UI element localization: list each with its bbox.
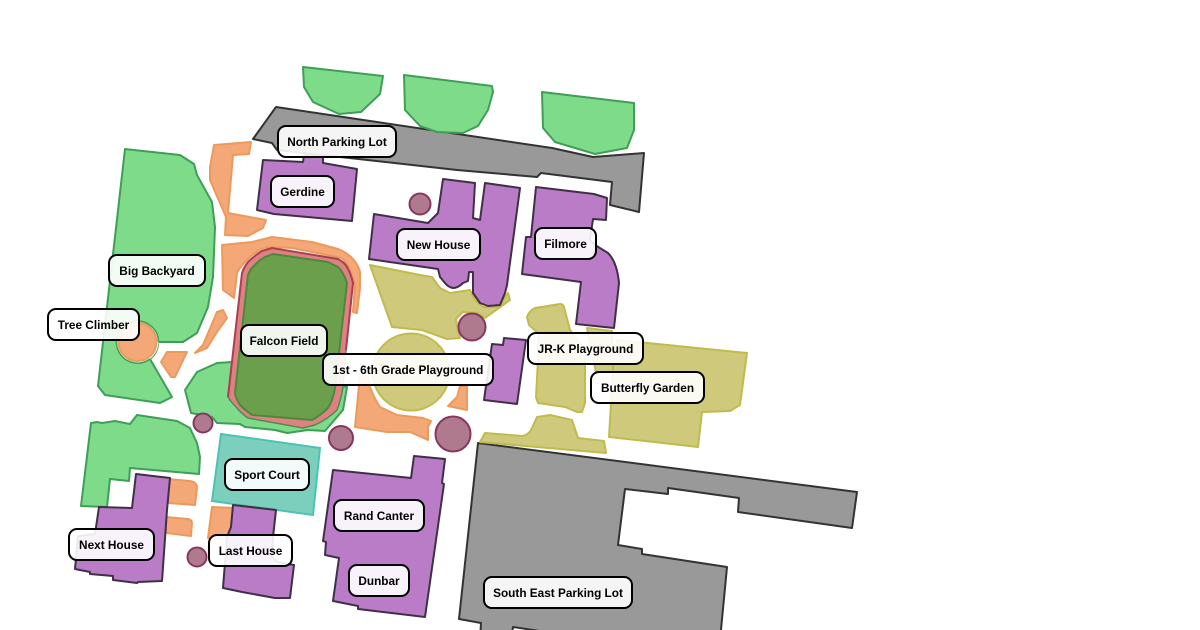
- tree: circle near new house: [410, 194, 430, 214]
- label: North Parking Lot: [278, 126, 396, 157]
- building: small playground building: [484, 338, 526, 404]
- yellow area: butterfly garden: [609, 340, 747, 447]
- yellow area: playground upper: [370, 265, 510, 339]
- green area: top middle: [404, 75, 493, 133]
- label: Falcon Field: Falcon Field: [250, 334, 318, 348]
- sport court: [212, 434, 320, 515]
- label: Big Backyard: [109, 255, 205, 286]
- tree: circle below field: [329, 426, 353, 450]
- orange area: north west walkway: [210, 142, 266, 236]
- label: South East Parking Lot: [484, 577, 632, 608]
- label: Tree Climber: Tree Climber: [58, 318, 130, 332]
- tree: large circle: [436, 416, 470, 452]
- yellow area: playground circle: [372, 334, 450, 410]
- falcon field track: [228, 248, 353, 428]
- yellow area: bottom strip: [480, 415, 606, 453]
- label: Rand Canter: [334, 500, 424, 531]
- label: Rand Canter: Rand Canter: [344, 509, 414, 523]
- label: New House: [397, 229, 480, 260]
- tree climber outline: [117, 321, 158, 363]
- label: Next House: [69, 529, 154, 560]
- label: Butterfly Garden: Butterfly Garden: [601, 381, 694, 395]
- label: 1st - 6th Grade Playground: 1st - 6th Grade Playground: [333, 363, 483, 377]
- label: Sport Court: Sport Court: [234, 468, 300, 482]
- green area: top left: [303, 67, 383, 114]
- building: next house: [75, 474, 170, 583]
- label: Sport Court: [225, 459, 309, 490]
- label: Dunbar: [349, 565, 409, 596]
- label: Last House: [209, 535, 292, 566]
- orange area: small wedge: [161, 352, 187, 377]
- tree: circle left of field: [194, 414, 212, 432]
- track outline lower: [228, 350, 346, 428]
- orange area: sliver: [195, 310, 227, 353]
- building: new house: [369, 179, 520, 306]
- south east parking lot shape: [459, 443, 857, 630]
- north parking lot shape: [253, 107, 644, 212]
- tree climber orange: [118, 323, 156, 361]
- yellow area: JR-K playground: [527, 304, 585, 412]
- label: Butterfly Garden: [591, 372, 704, 403]
- falcon field grass: [235, 254, 347, 420]
- label: Filmore: [535, 228, 596, 259]
- building: filmore: [522, 187, 619, 328]
- label: Gerdine: [271, 176, 334, 207]
- tree climber halo: [116, 321, 158, 363]
- tree: circle near playground: [458, 314, 486, 340]
- yellow area: strip: [587, 328, 613, 372]
- label: New House: New House: [407, 238, 471, 252]
- orange area: next house upper: [168, 479, 197, 505]
- orange area: last house: [208, 507, 235, 540]
- green area: top right: [542, 92, 634, 154]
- tree: circle near last house: [188, 548, 206, 566]
- label: Tree Climber: [48, 309, 139, 340]
- label: North Parking Lot: North Parking Lot: [287, 135, 387, 149]
- green area: big backyard: [98, 149, 215, 403]
- label: Filmore: Filmore: [544, 237, 587, 251]
- track outline upper: [228, 248, 353, 397]
- label: JR-K Playground: JR-K Playground: [538, 342, 633, 356]
- label: Gerdine: Gerdine: [280, 185, 325, 199]
- label: JR-K Playground: [528, 333, 643, 364]
- orange area: playground right: [448, 386, 467, 410]
- building: last house: [223, 505, 294, 598]
- label: Next House: Next House: [79, 538, 144, 552]
- green area: around field: [185, 362, 347, 433]
- orange area: playground left: [355, 375, 431, 440]
- label: 1st - 6th Grade Playground: [323, 354, 493, 385]
- label: Falcon Field: [241, 325, 327, 356]
- orange area: around field: [222, 237, 360, 313]
- green area: bottom left: [81, 415, 200, 507]
- label: Dunbar: Dunbar: [358, 574, 400, 588]
- label: Big Backyard: Big Backyard: [119, 264, 195, 278]
- label: Last House: Last House: [219, 544, 283, 558]
- building: rand canter and dunbar: [323, 456, 445, 617]
- label: South East Parking Lot: South East Parking Lot: [493, 586, 623, 600]
- building: gerdine: [257, 155, 357, 221]
- orange area: next house lower: [166, 517, 192, 536]
